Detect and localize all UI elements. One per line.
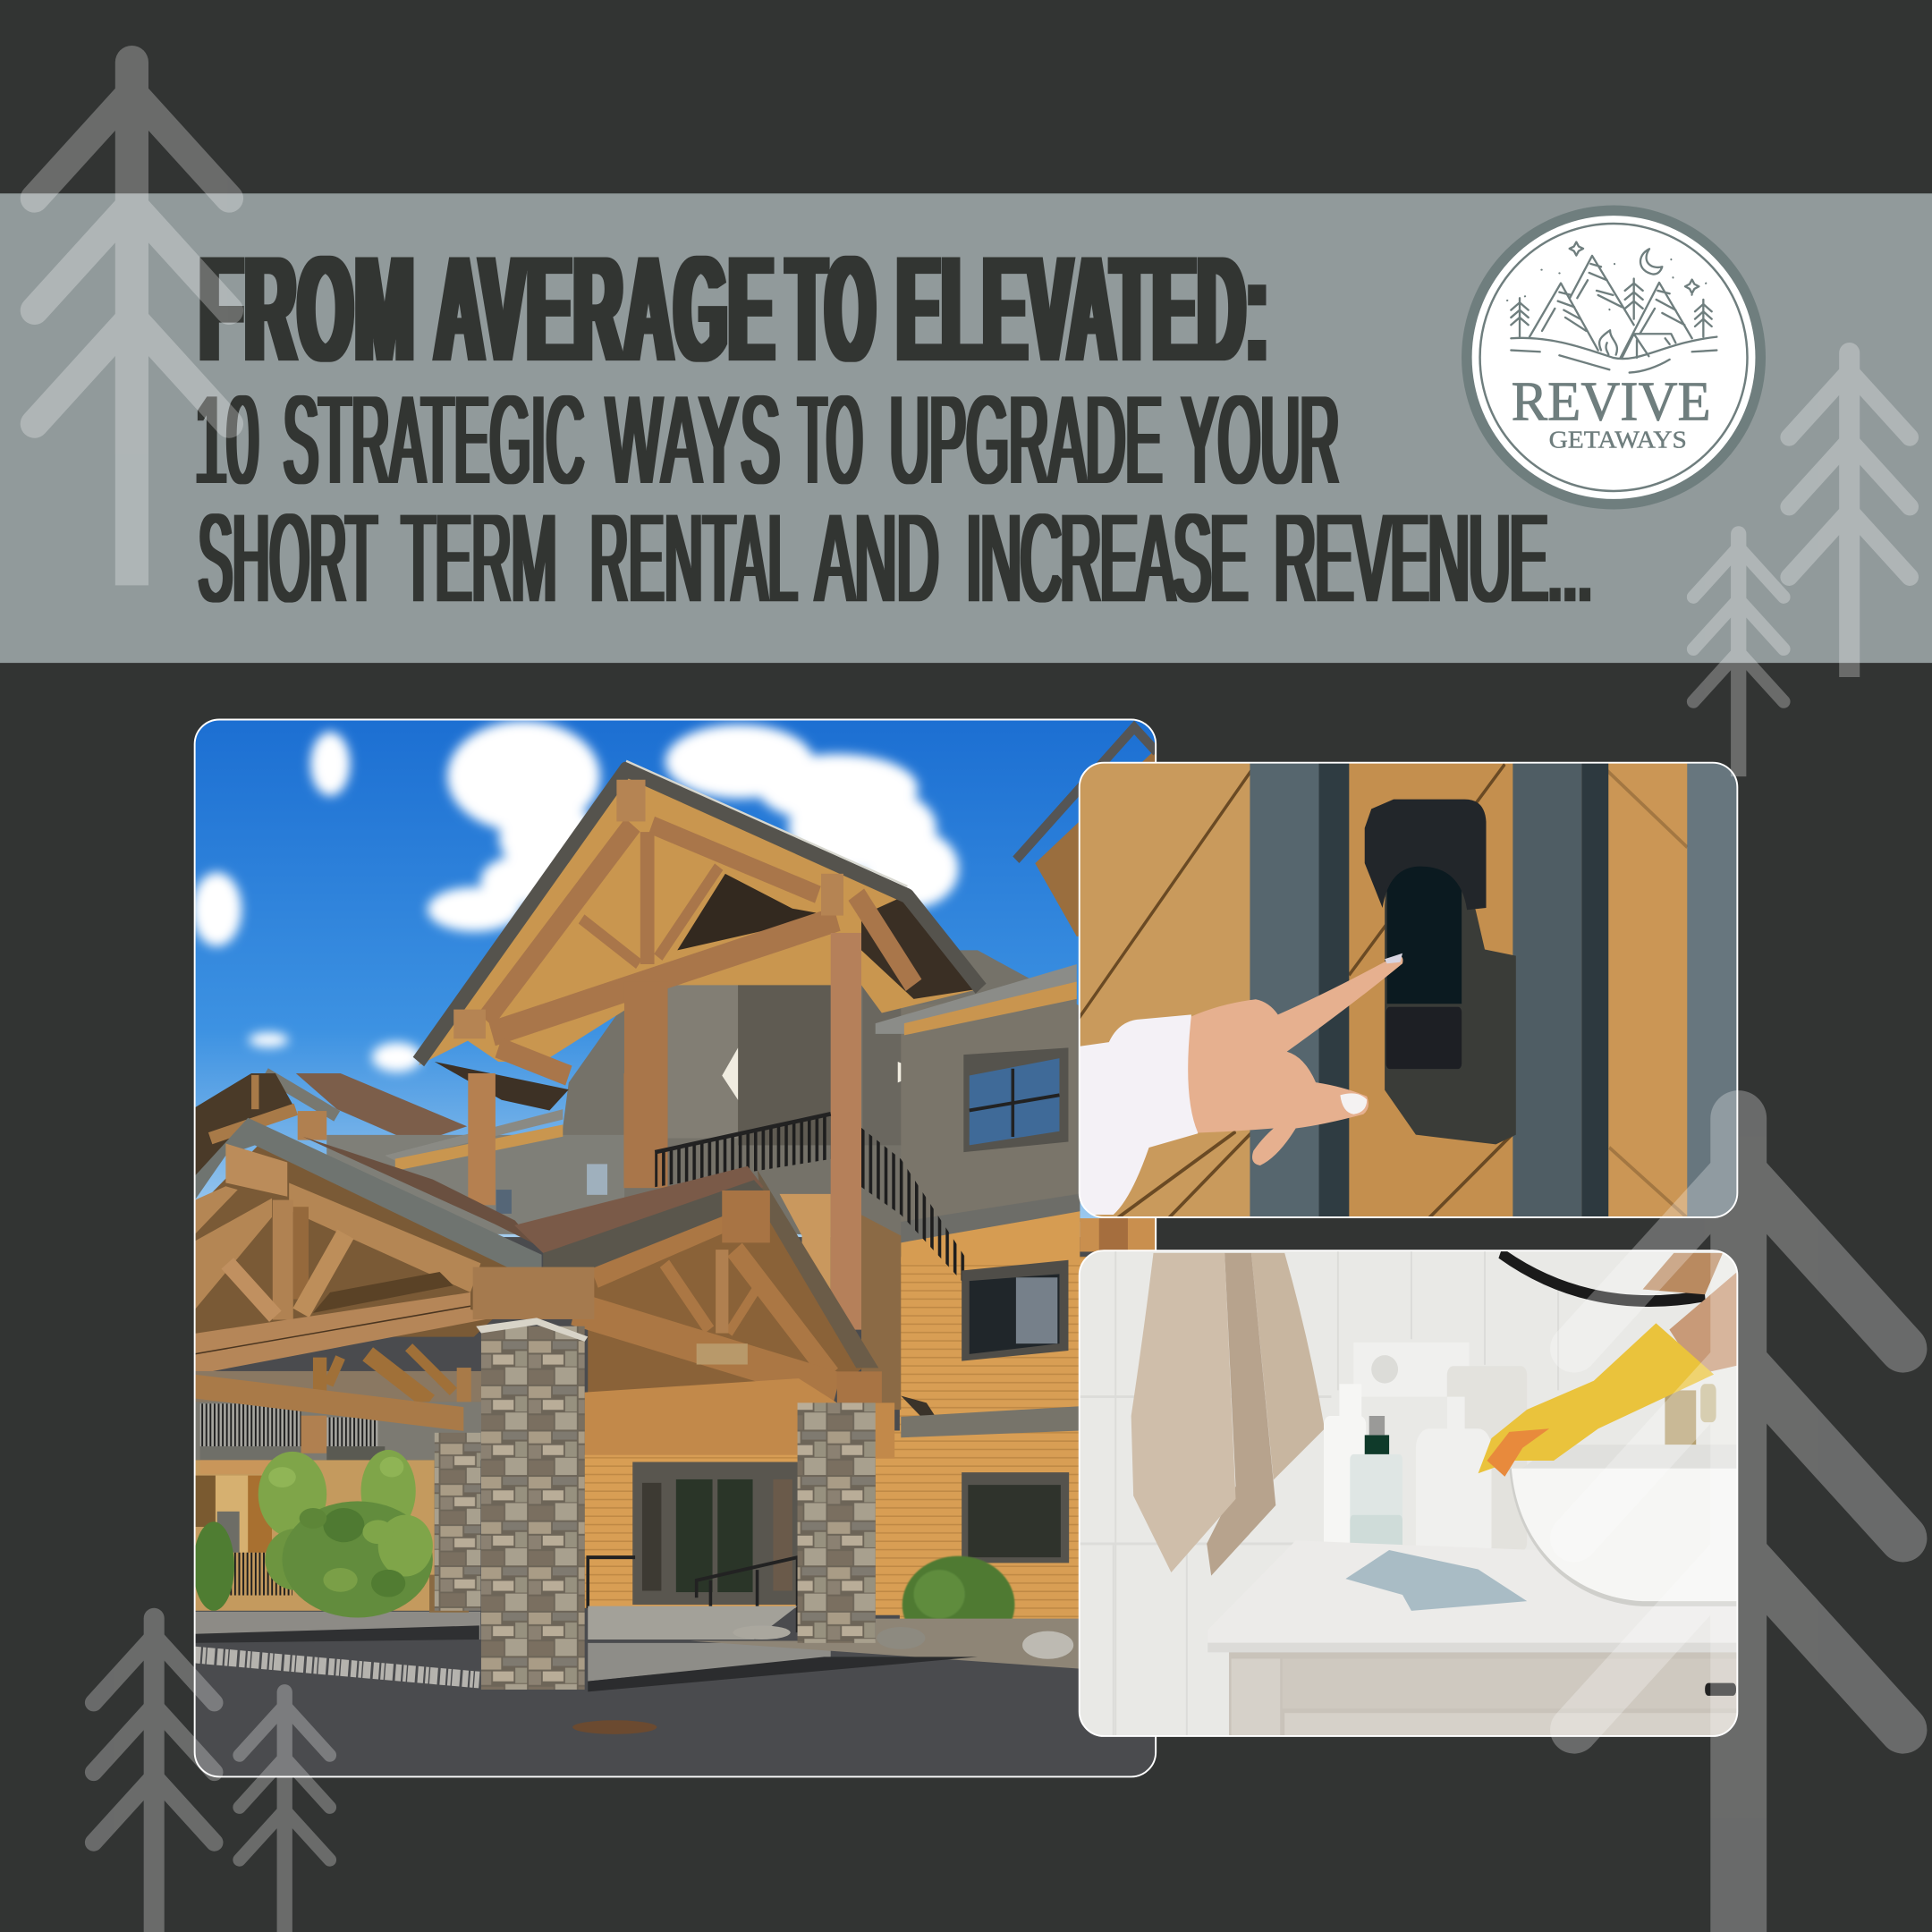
soffit bbox=[195, 1147, 506, 1337]
subheading line 1 bbox=[195, 369, 1339, 511]
windows bbox=[963, 1047, 1068, 1152]
subheading line 1: YOUR bbox=[1182, 369, 1339, 510]
mirror arc bbox=[1500, 1253, 1705, 1301]
gable soffit bbox=[419, 762, 981, 1065]
subheading line 1: 10 bbox=[195, 370, 258, 511]
logo artwork: mountains, trees, tent, moon bbox=[1507, 242, 1716, 373]
faucet bbox=[1665, 1390, 1696, 1448]
photo frame: sink bbox=[1080, 1250, 1737, 1736]
photo frame: smart lock bbox=[1080, 763, 1737, 1217]
wall tiles bbox=[1078, 1250, 1558, 1735]
subheading line 1: UPGRADE bbox=[890, 369, 1162, 510]
basin bbox=[1512, 1445, 1741, 1477]
main tie beams and rafters bbox=[195, 1199, 272, 1309]
left roofs and fascia bbox=[302, 1137, 536, 1244]
sleeve bbox=[1078, 1014, 1198, 1215]
lodge drawing: porte-cochere and back-left wing bbox=[193, 1073, 666, 1617]
paper roll bbox=[1447, 1366, 1527, 1551]
left gable bbox=[195, 1073, 292, 1176]
photo: timber lodge exterior bbox=[192, 719, 1165, 1783]
icon: pine tree top left bbox=[35, 46, 229, 585]
right bush bbox=[902, 1555, 1016, 1619]
below the beam bbox=[195, 1370, 481, 1402]
siding seams bbox=[1078, 764, 1687, 1218]
posts bbox=[468, 1073, 496, 1205]
icon: pine tree bottom left bbox=[94, 1608, 215, 1932]
counter bbox=[1208, 1540, 1736, 1651]
back wall bbox=[326, 1135, 624, 1234]
back pillar bbox=[435, 1433, 480, 1611]
door frame posts bbox=[1250, 763, 1319, 1220]
sponge bbox=[1487, 1428, 1549, 1477]
heading: FROM bbox=[199, 225, 414, 393]
arms bbox=[1643, 1253, 1723, 1294]
photo frame: lodge bbox=[195, 719, 1156, 1776]
icon: pine tree bottom left small bbox=[240, 1684, 330, 1932]
subheading line 2: RENTAL bbox=[590, 488, 797, 628]
heading bbox=[199, 225, 1268, 394]
back roof bbox=[295, 1073, 467, 1135]
title band bbox=[0, 193, 1932, 663]
logo wordmark: GETAWAYS: GETAWAYS bbox=[1549, 426, 1687, 453]
cabinet bbox=[1229, 1652, 1741, 1739]
subheading line 2: AND bbox=[816, 489, 939, 629]
heading: AVERAGE bbox=[435, 225, 774, 393]
heading: ELEVATED: bbox=[897, 226, 1268, 393]
bottles bbox=[1324, 1416, 1366, 1560]
switch plate bbox=[1353, 1343, 1470, 1397]
lodge foreground: balcony, central post, roof, pillar bbox=[473, 981, 831, 1690]
hand bbox=[1188, 955, 1403, 1165]
right truss bbox=[588, 1222, 862, 1392]
tan fascia bbox=[385, 1109, 563, 1161]
icon: pine tree right small bbox=[1693, 526, 1784, 776]
photo: smart lock and hand bbox=[1078, 763, 1741, 1220]
subheading line 2: REVENUE... bbox=[1274, 489, 1593, 629]
logo: Revive Getaways badge bbox=[1462, 206, 1766, 509]
subheading line 1: STRATEGIC bbox=[284, 369, 584, 510]
subheading line 2: SHORT bbox=[199, 487, 377, 628]
trash bin bbox=[429, 1575, 469, 1613]
right pillar bbox=[798, 1402, 876, 1643]
towels bbox=[1251, 1253, 1325, 1479]
glove bbox=[1479, 1323, 1714, 1473]
icon: pine tree right upper bbox=[1789, 343, 1910, 677]
subheading line 1: TO bbox=[799, 370, 862, 511]
logo wordmark: REVIVE: REVIVE bbox=[1512, 371, 1711, 432]
blue cloth bbox=[1345, 1550, 1527, 1611]
lower wall bbox=[195, 1460, 435, 1611]
subheading line 2: INCREASE bbox=[966, 488, 1248, 629]
entry door bbox=[632, 1462, 799, 1605]
subheading line 1: WAYS bbox=[606, 371, 780, 511]
siding bbox=[900, 1257, 1093, 1625]
clouds bbox=[192, 721, 959, 1072]
heading: TO bbox=[787, 225, 875, 394]
sky bbox=[195, 719, 1156, 1237]
lodge drawing: upper gable, right wing, entry and ground bbox=[193, 727, 1165, 1783]
photo: cleaning bathroom sink bbox=[1078, 1250, 1741, 1739]
upper-right roof corner bbox=[1035, 749, 1157, 936]
icon: large pine tree bottom right bbox=[1574, 1090, 1903, 1932]
subheading line 2: TERM bbox=[402, 487, 557, 628]
grey wall bbox=[563, 950, 1080, 1242]
lock body bbox=[1385, 867, 1516, 1144]
ground bbox=[193, 1612, 480, 1640]
subheading line 2 bbox=[199, 487, 1593, 629]
bushes bbox=[193, 1450, 433, 1617]
